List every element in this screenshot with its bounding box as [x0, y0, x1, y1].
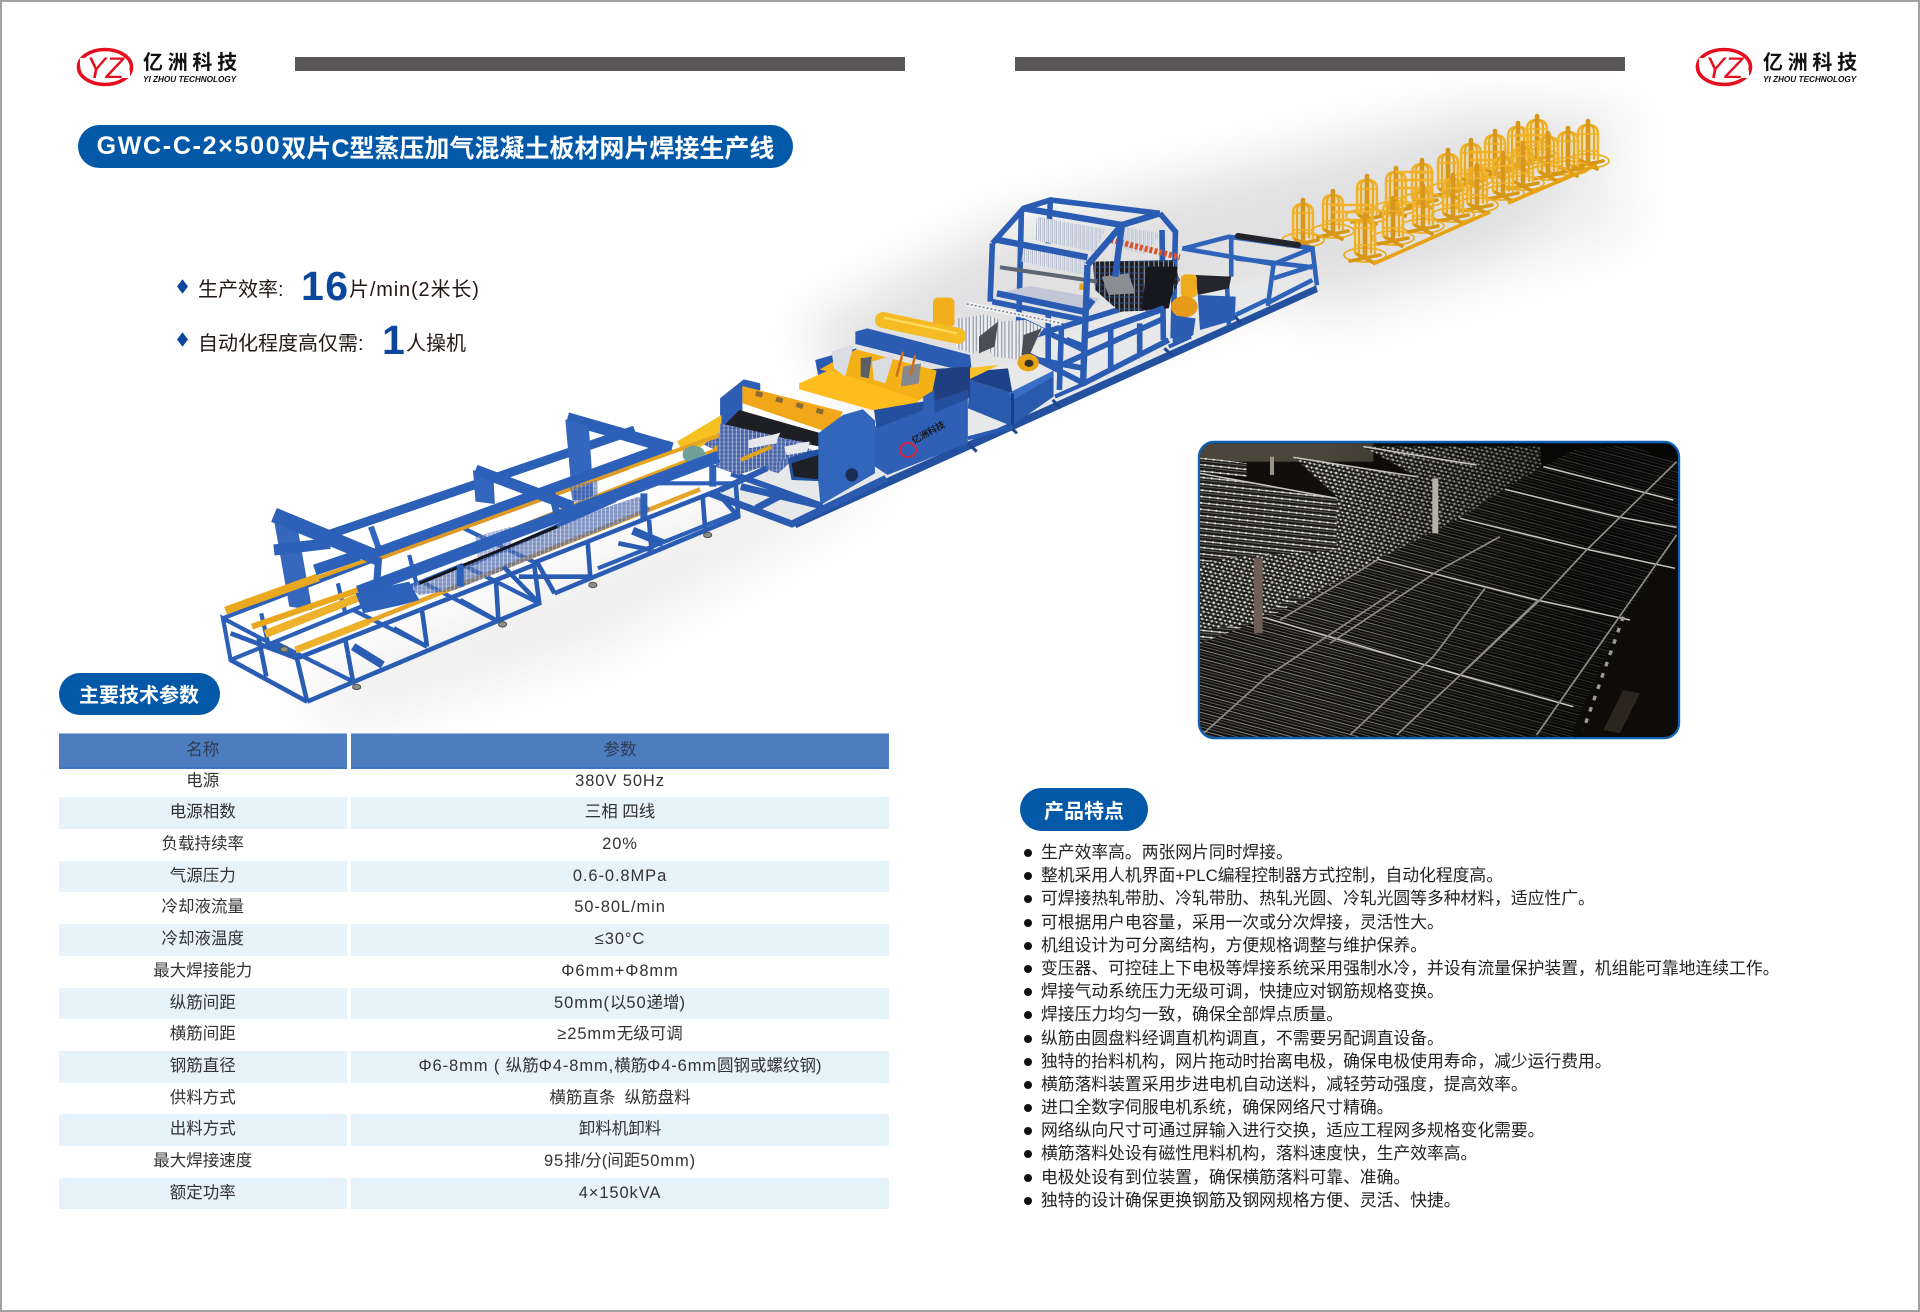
parameters table: 冷却液流量: [162, 898, 244, 916]
parameters table: 负载持续率: [162, 835, 244, 853]
entry blue panels: [720, 379, 760, 428]
logo left: 亿洲科技: [143, 52, 242, 74]
parameters table: 卸料机卸料: [579, 1120, 661, 1138]
machinery behind platform: [919, 367, 970, 410]
rear frame: [1182, 237, 1317, 325]
features list: 整机采用人机界面+PLC编程控制器方式控制，自动化程度高。: [1041, 866, 1503, 885]
features list: 机组设计为可分离结构，方便规格调整与维护保养。: [1041, 936, 1427, 955]
main machine: [700, 200, 1318, 528]
features list: 电极处设有到位装置，确保横筋落料可靠、准确。: [1041, 1168, 1410, 1187]
stat: production efficiency: [177, 263, 480, 309]
table header: 名称: [186, 741, 219, 759]
features list: 可焊接热轧带肋、冷轧带肋、热轧光圆、冷轧光圆等多种材料，适应性广。: [1041, 889, 1595, 908]
yellow chute: [677, 415, 721, 458]
title: 双片C型蒸压加气混凝土板材网片焊接生产线: [281, 134, 774, 162]
stat: production efficiency: 生产效率:: [198, 279, 284, 301]
title: GWC-C-2×500: [97, 132, 281, 160]
casters: [280, 532, 712, 690]
base rail: [792, 285, 1318, 528]
parameters table: 4×150kVA: [579, 1184, 661, 1202]
back gantry: [328, 418, 672, 535]
main base feet: [710, 478, 886, 524]
parameters table: Φ6-8mm ( 纵筋Φ4-8mm,横筋Φ4-6mm圆钢或螺纹钢): [418, 1057, 822, 1075]
disc: [683, 446, 705, 464]
logo right: YZ: [1705, 52, 1745, 85]
stat: automation: 人操机: [406, 333, 466, 355]
features list: 横筋落料装置采用步进电机自动送料，减轻劳动强度，提高效率。: [1041, 1075, 1528, 1094]
stat: production efficiency: 16: [301, 263, 350, 309]
parameters table: 50mm(以50递增): [554, 994, 686, 1012]
features list: 焊接压力均匀一致，确保全部焊点质量。: [1041, 1005, 1343, 1024]
features list: 纵筋由圆盘料经调直机构调直，不需要另配调直设备。: [1041, 1028, 1444, 1048]
tower front frame: [995, 208, 1164, 384]
parameters table: 电源: [186, 772, 219, 790]
features list: 独特的设计确保更换钢筋及钢网规格方便、灵活、快捷。: [1041, 1191, 1461, 1210]
cabinet: [874, 390, 968, 475]
logo left: [76, 48, 242, 86]
welder head: [855, 328, 971, 369]
heading: product features: [1020, 788, 1148, 830]
floor of base: [713, 283, 1316, 523]
logo right: YI ZHOU TECHNOLOGY: [1763, 75, 1856, 84]
heading: technical parameters: [58, 672, 220, 715]
features list: 生产效率高。两张网片同时焊接。: [1041, 843, 1293, 862]
parameters table: ≤30°C: [595, 930, 645, 948]
parameters table: ≥25mm无级可调: [557, 1025, 683, 1043]
parameters table: 0.6-0.8MPa: [573, 867, 667, 885]
parameters table: 冷却液温度: [162, 930, 244, 948]
heading: product features: 产品特点: [1044, 801, 1124, 823]
posts: [1254, 558, 1263, 633]
parameters table: 20%: [602, 835, 638, 853]
yellow motor box: [933, 298, 954, 327]
features list: 网络纵向尺寸可通过屏输入进行交换，适应工程网多规格变化需要。: [1041, 1121, 1544, 1140]
parameters table: 50-80L/min: [574, 898, 666, 916]
logo left: YZ: [86, 52, 126, 85]
heading: technical parameters: 主要技术参数: [79, 685, 199, 707]
features list: 变压器、可控硅上下电极等焊接系统采用强制水冷，并设有流量保护装置，机组能可靠地连续工作。: [1041, 959, 1779, 978]
parameters table: 三相 四线: [585, 803, 655, 821]
parameters table: 最大焊接速度: [153, 1152, 252, 1170]
speckled edge: [1583, 617, 1623, 730]
back cart frames: [223, 447, 736, 702]
middle block: [968, 371, 1054, 426]
parameters table: Φ6mm+Φ8mm: [561, 962, 679, 980]
header bar left: [295, 57, 905, 71]
gold rails: [226, 435, 728, 650]
parameters table: 出料方式: [170, 1120, 236, 1138]
features list: 横筋落料处设有磁性甩料机构，落料速度快，生产效率高。: [1041, 1144, 1477, 1163]
stat: automation: 1: [382, 317, 405, 363]
photo: welded wire mesh: [1198, 440, 1680, 740]
front gantry: [274, 445, 718, 593]
cabinet logotype: 亿洲科技: [910, 419, 946, 446]
finished mesh: [407, 497, 652, 595]
table header: [59, 733, 889, 769]
parameters table: 电源相数: [170, 803, 236, 821]
wire curtains: [1035, 217, 1105, 252]
features list: 可根据用户电容量，采用一次或分次焊接，灵活性大。: [1041, 913, 1444, 932]
title: [78, 125, 793, 168]
parameters table: 横筋间距: [170, 1025, 236, 1043]
parameters table: 最大焊接能力: [153, 962, 252, 980]
spool racks: [1282, 116, 1609, 264]
parameters table: 纵筋间距: [170, 994, 236, 1012]
parameters table: 钢筋直径: [170, 1057, 236, 1075]
front cart frames: [231, 483, 738, 702]
parameters table: 供料方式: [170, 1089, 236, 1107]
logo right: 亿洲科技: [1763, 52, 1862, 74]
logo left: YI ZHOU TECHNOLOGY: [143, 75, 236, 84]
stat: production efficiency: 片/min(2米长): [349, 279, 480, 301]
welder dark machinery: [1093, 260, 1180, 312]
parameters table: 额定功率: [170, 1184, 236, 1202]
wheel: [1017, 354, 1039, 371]
tower back frame and lower grid: [990, 200, 1175, 390]
table header: 参数: [604, 741, 636, 759]
yellow platform: [820, 349, 937, 402]
motor: [1181, 274, 1197, 298]
parameters table: [59, 733, 889, 1209]
parameters table: 横筋直条 纵筋盘料: [549, 1089, 691, 1107]
features list: 焊接气动系统压力无级可调，快捷应对钢筋规格变换。: [1041, 982, 1444, 1001]
features list: [1024, 843, 1779, 1210]
parameters table: 380V 50Hz: [575, 772, 665, 790]
parameters table: 气源压力: [170, 867, 236, 885]
mesh bright edges: [1200, 447, 1677, 707]
stat: automation: [177, 317, 466, 363]
features list: 进口全数字伺服电机系统，确保网络尺寸精确。: [1041, 1098, 1393, 1117]
logo right: [1696, 48, 1862, 86]
discharge racks: [223, 415, 886, 702]
wire guide fans: [955, 314, 1000, 353]
header bar right: [1015, 57, 1625, 71]
features list: 独特的抬料机构，网片拖动时抬离电极，确保电极使用寿命，减少运行费用。: [1041, 1052, 1612, 1071]
stat: automation: 自动化程度高仅需:: [198, 333, 364, 355]
base rungs: [968, 337, 1191, 438]
parameters table: 95排/分(间距50mm): [544, 1152, 696, 1170]
